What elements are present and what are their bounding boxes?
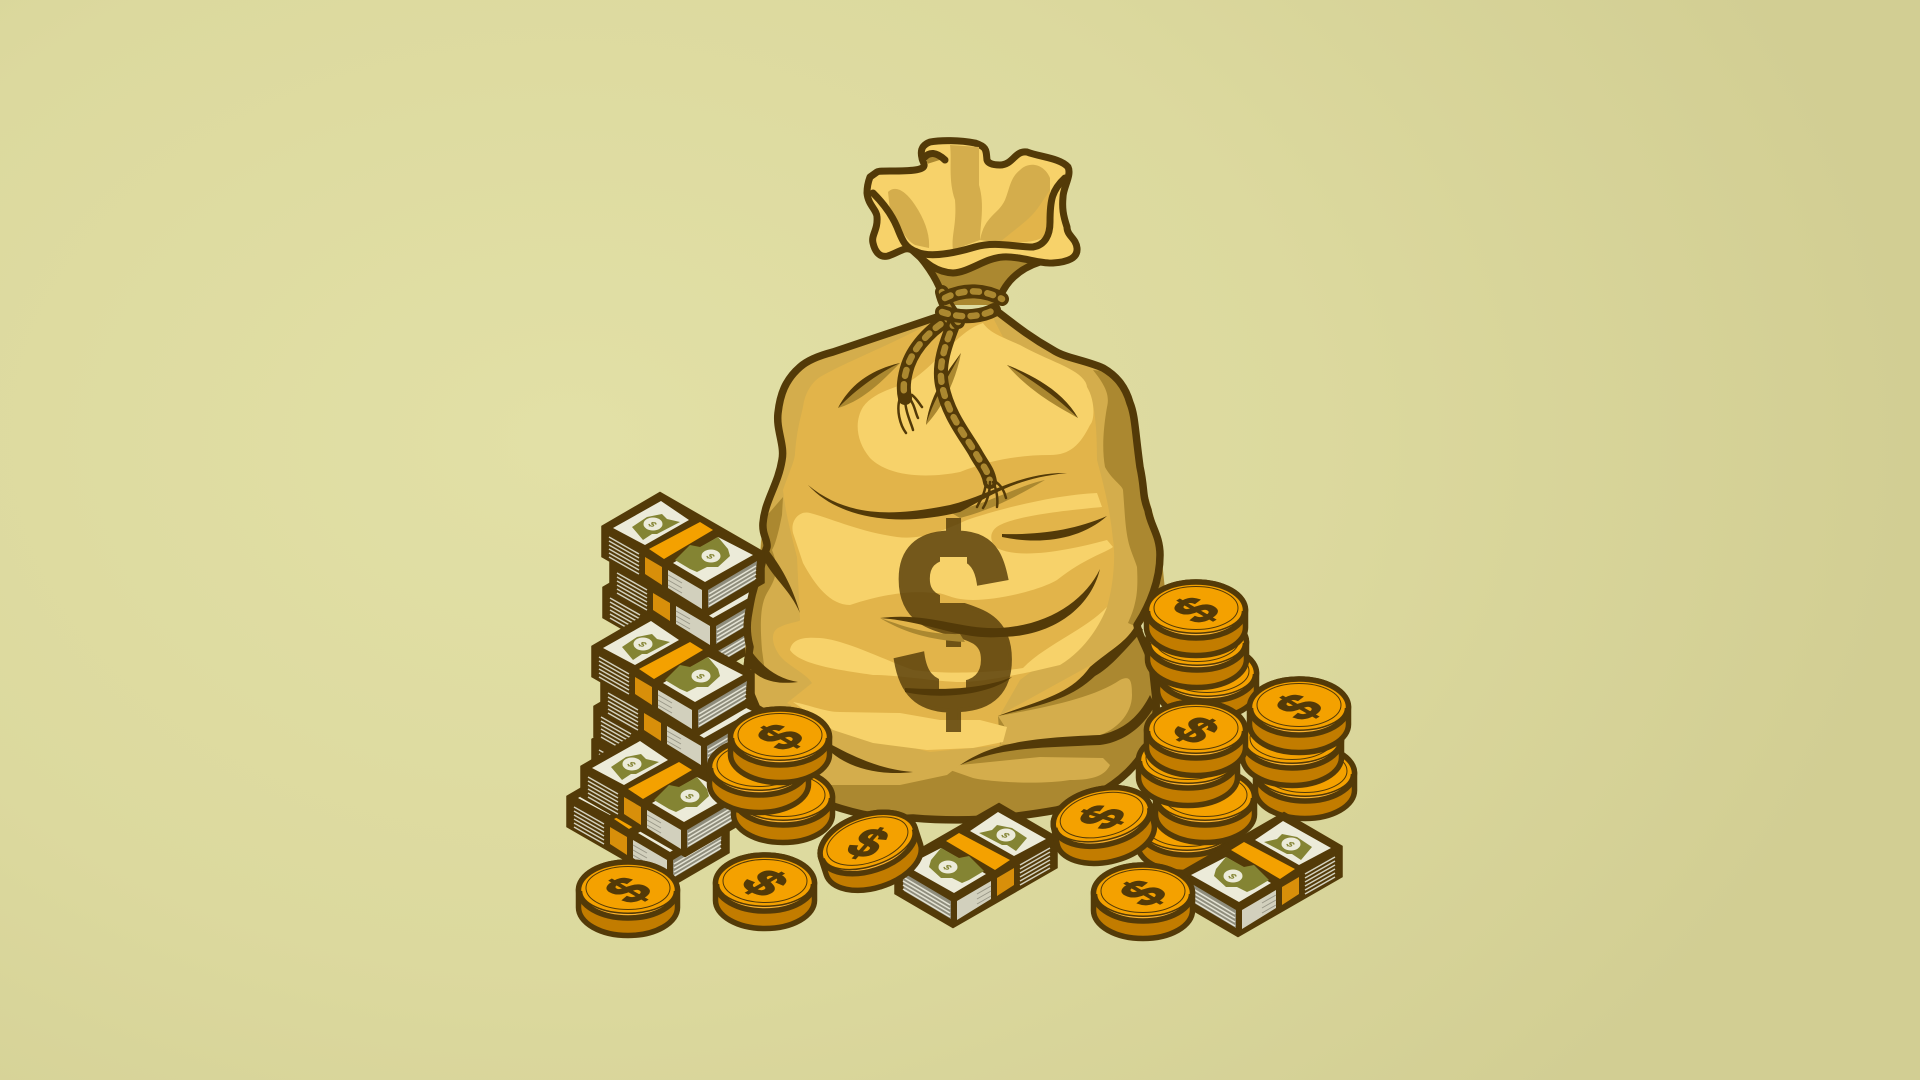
cash bundle: top of left pile: $ [645,521,659,529]
ruffle front rim [873,153,1065,255]
coin: front middle: $ [729,862,801,904]
coin: front right [1094,865,1192,938]
rope [898,291,1006,508]
rope frays [898,395,1006,508]
money bag [744,141,1165,822]
coin [1146,702,1246,776]
coin: tilted right [1048,779,1160,872]
cash stacks: left pile, lower stack [570,736,740,883]
cash bundle: $ [635,641,649,649]
wrinkles [744,353,1155,773]
bag top ruffle [867,141,1077,273]
coin: front right: $ [1107,872,1180,914]
cash bundle: $ [682,793,696,801]
dollar sign on bag: $ [893,473,1013,770]
coin: front left: $ [592,869,665,911]
coin: $ [1160,709,1232,751]
coin stack right, tall [1146,582,1256,718]
bag bottom shadow [815,625,1156,822]
coin: tilted left [812,801,929,902]
cash bundle: front right [1183,816,1339,933]
coin: front middle [716,855,814,928]
bag body [745,312,1160,820]
ruffle inner folds [888,189,929,248]
cash stacks behind the bag [606,532,769,674]
coin stack right, front [1138,702,1254,872]
cash bundle: front middle: $ [998,832,1012,840]
coin: $ [1160,589,1233,631]
cash bundle [584,736,740,853]
cash bundle: front right: $ [1225,873,1239,881]
coin: front left [578,862,678,936]
neck [920,255,1040,305]
cash bundle: front middle: $ [940,864,954,872]
cash bundle: $ [693,673,707,681]
coin: tilted right: $ [1065,799,1139,835]
coin: $ [744,716,817,758]
cash bundle: front right: $ [1283,841,1297,849]
cash bundle: $ [624,761,638,769]
cash bundle: top of left pile: $ [703,553,717,561]
coin: $ [1263,686,1336,728]
right shading [990,312,1160,715]
bag light areas [858,323,1093,475]
coin stack far right [1242,679,1354,818]
illustration: money bag with coins and cash [566,137,1358,942]
bag outline [745,312,1160,820]
cash stacks: left pile, middle stack [595,616,760,826]
coin stack near cash [710,709,832,842]
cash bundle: front middle [898,807,1054,924]
cash bundle [595,616,751,733]
left shading [745,317,937,790]
coin: tilted left: $ [836,819,900,867]
cash bundle: top of left pile [605,496,761,613]
